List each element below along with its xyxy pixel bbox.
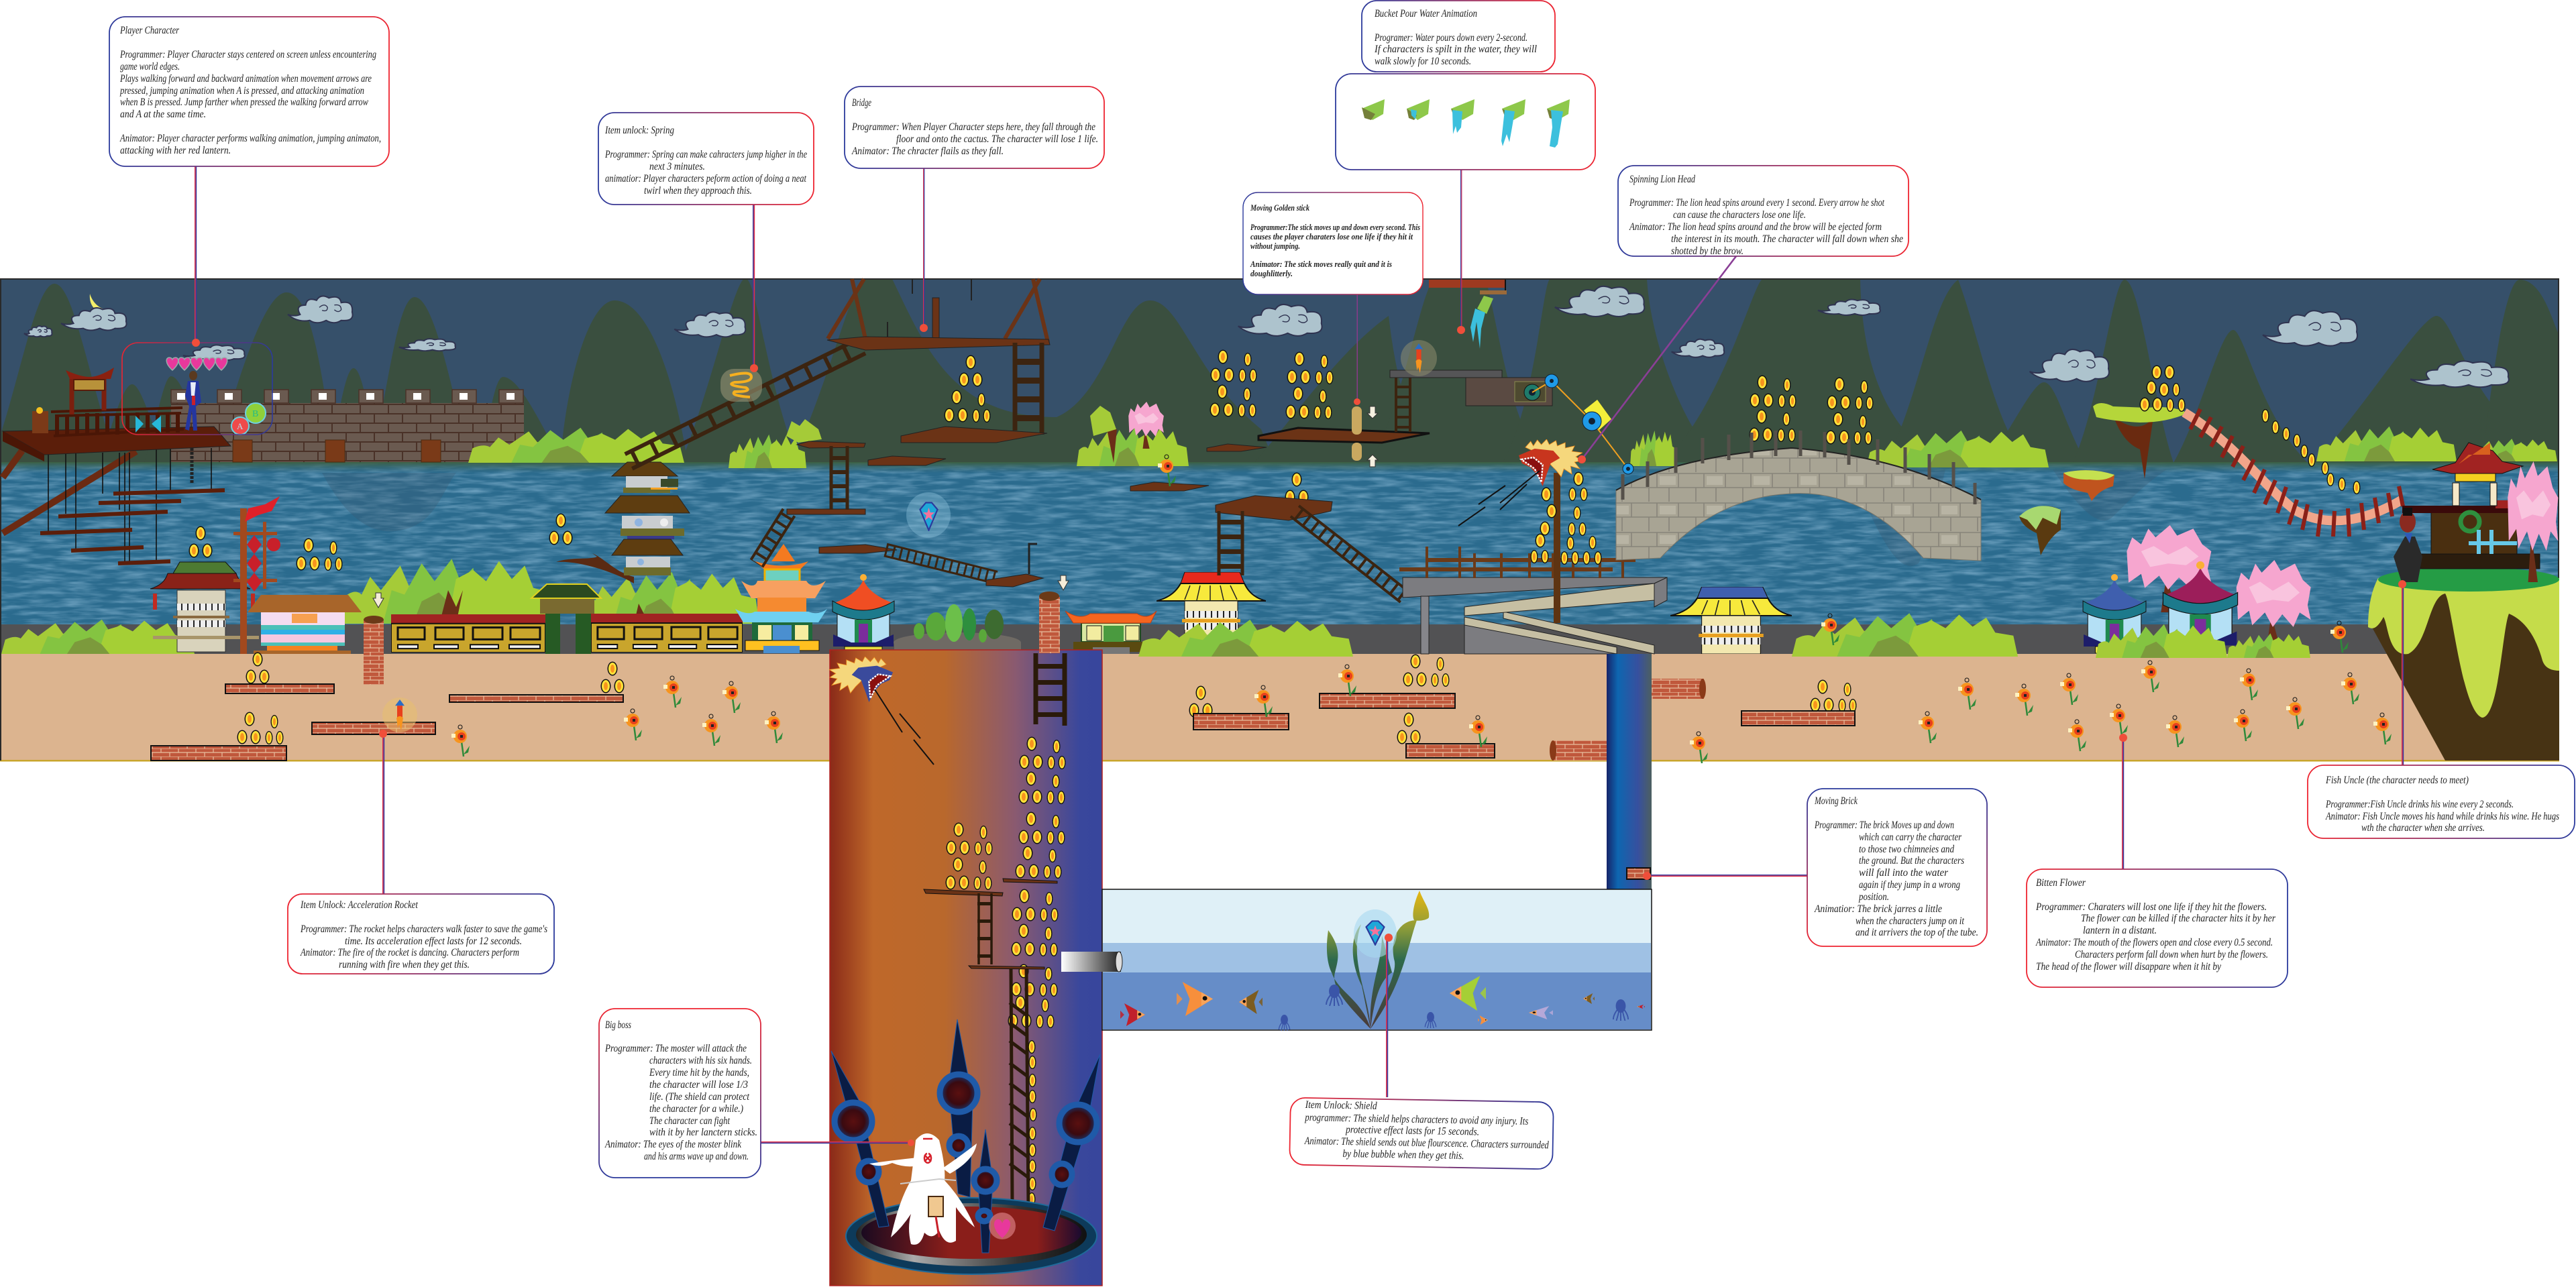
sky backdrop xyxy=(0,278,2559,463)
yellow pagoda with red roof xyxy=(1157,572,1266,639)
road bushes xyxy=(1138,613,2018,657)
callout: acceleration rocket xyxy=(288,894,554,974)
callout: big boss: the character for a while.) xyxy=(649,1103,743,1115)
left pagoda xyxy=(150,562,259,652)
life hearts xyxy=(167,358,227,370)
callout: big boss: characters with his six hands. xyxy=(649,1055,752,1066)
dragon head in shaft xyxy=(829,657,893,702)
callout: player character: when B is pressed. Jump farther when pressed the walking forward arrow xyxy=(120,97,368,108)
callout: fish uncle: Fish Uncle (the character needs to meet) xyxy=(2325,775,2469,786)
callout: player character: Animator: Player character performs walking animation, jumping animaton, xyxy=(119,133,381,144)
callout: fish uncle xyxy=(2308,765,2575,838)
control buttons: B xyxy=(252,409,258,419)
callout: player character: and A at the same time. xyxy=(120,109,206,120)
player character xyxy=(185,371,201,431)
callout: item unlock shield xyxy=(1289,1098,1554,1169)
callout: acceleration rocket: time. Its acceleration effect lasts for 12 seconds. xyxy=(345,936,522,947)
small trees on background xyxy=(786,402,1164,463)
shaft arrows xyxy=(875,689,934,765)
callout: bridge: Animator: The chracter flails as they fall. xyxy=(851,146,1004,157)
callout: spinning lion head xyxy=(1618,166,1909,257)
stone bridge xyxy=(1616,431,1981,561)
floating islands xyxy=(2019,403,2188,555)
callout: bitten flower: Animator: The mouth of the flowers open and close every 0.5 second. xyxy=(2035,937,2273,948)
callout: acceleration rocket: Animator: The fire of the rocket is dancing. Characters perform xyxy=(300,947,519,958)
callout: acceleration rocket: Item Unlock: Acceleration Rocket xyxy=(300,899,418,911)
willows behind town xyxy=(340,553,759,624)
shaft platforms and ladders xyxy=(924,879,1057,1207)
callout: moving brick: Programmer: The brick Moves up and down xyxy=(1814,820,1954,831)
shield pickup xyxy=(906,492,951,538)
dock with ramps xyxy=(1399,547,1667,654)
callout: bucket pour water animation: Bucket Pour Water Animation xyxy=(1375,8,1477,19)
arrow marker xyxy=(373,593,384,608)
river water xyxy=(0,462,2559,625)
heart pickup xyxy=(989,1213,1016,1239)
spring item xyxy=(720,369,762,402)
coin tower xyxy=(1531,472,1602,565)
yellow long buildings xyxy=(391,584,743,654)
connector lines xyxy=(195,166,2404,1143)
callout: bitten flower xyxy=(2027,869,2288,987)
fish uncle character xyxy=(2394,508,2422,582)
callout: bucket pour water animation: walk slowly for 10 seconds. xyxy=(1375,56,1471,67)
callout: moving brick: position. xyxy=(1858,891,1889,903)
panel: bucket animation frames xyxy=(1336,74,1595,170)
seaweed xyxy=(1327,891,1429,1029)
callout: item unlock spring: Item unlock: Spring xyxy=(604,125,674,136)
callout: bitten flower: Characters perform fall down when hurt by the flowers. xyxy=(2075,949,2268,960)
moving golden stick xyxy=(1352,406,1378,467)
background bushes xyxy=(468,427,2557,468)
callout: moving brick: the ground. But the characters xyxy=(1859,855,1964,866)
callout: bucket pour water animation xyxy=(1362,1,1555,72)
callout: player character: Programmer: Player Character stays centered on screen unless encountering xyxy=(119,49,376,60)
connector end dots xyxy=(192,324,2406,1146)
callout: spinning lion head: Programmer: The lion head spins around every 1 second. Every arrow he shot xyxy=(1629,197,1884,209)
chimney 2 xyxy=(1039,592,1060,653)
center platform and ladders xyxy=(1216,496,1332,575)
bricks in ground xyxy=(151,684,1855,761)
ladder to slab xyxy=(1396,378,1410,432)
moon xyxy=(90,294,109,312)
pulley kite xyxy=(1532,374,1633,474)
callout: moving golden stick: Moving Golden stick xyxy=(1250,203,1309,213)
callout: moving golden stick: without jumping. xyxy=(1250,241,1300,251)
horizontal brick pipes xyxy=(1550,679,1706,761)
upper stick platform xyxy=(1258,428,1430,443)
callout: player character: game world edges. xyxy=(120,61,180,72)
great wall xyxy=(171,390,524,462)
callout: bridge xyxy=(845,87,1104,168)
callout: bridge: floor and onto the cactus. The character will lose 1 life. xyxy=(896,133,1098,145)
callout: bucket pour water animation: If characters is spilt in the water, they will xyxy=(1374,44,1537,55)
lion pole xyxy=(1554,473,1560,623)
spinning lion head xyxy=(1519,439,1582,486)
orange pagoda xyxy=(735,544,827,653)
callout: big boss: Every time hit by the hands, xyxy=(649,1067,749,1078)
callout: fish uncle: Programmer:Fish Uncle drinks his wine every 2 seconds. xyxy=(2325,799,2514,810)
callout: spinning lion head: Animator: The lion head spins around and the brow will be ejected form xyxy=(1629,221,1882,233)
callout: moving brick: to those two chimneies and xyxy=(1859,844,1955,855)
flag pole with lanterns xyxy=(233,496,280,654)
coins in boss shaft xyxy=(946,736,1065,1206)
long ladder to spring xyxy=(625,339,865,469)
pipe in shaft xyxy=(1061,952,1122,972)
callout: item unlock spring: animatior: Player characters peform action of doing a neat xyxy=(605,173,806,184)
callout: bucket pour water animation: Programer: Water pours down every 2-second. xyxy=(1374,32,1527,44)
boss spike rings xyxy=(835,1074,1097,1221)
callout: moving brick: which can carry the character xyxy=(1859,832,1962,843)
underwater panel xyxy=(1102,889,1652,1030)
tall pagoda xyxy=(605,462,690,575)
mountains xyxy=(0,278,2559,463)
callout: moving golden stick: causes the player charaters lose one life if they hit it xyxy=(1250,231,1413,241)
clouds xyxy=(24,286,2509,387)
blue tube xyxy=(1607,654,1652,889)
kiosk houses xyxy=(833,574,894,653)
control buttons xyxy=(136,403,266,435)
callout: moving brick xyxy=(1807,789,1987,946)
boss pit ring xyxy=(846,1198,1097,1274)
boss spikes xyxy=(831,1019,1100,1253)
cactus garden xyxy=(894,604,1021,653)
callout: acceleration rocket: Programmer: The rocket helps characters walk faster to save the game's xyxy=(300,924,547,935)
shaft top ladder xyxy=(1036,653,1065,726)
coins water and land xyxy=(189,350,1873,744)
callout: bitten flower: Bitten Flower xyxy=(2036,877,2086,889)
callout: moving brick: Animatior: The brick jarres a little xyxy=(1814,903,1942,915)
callout: player character: pressed, jumping animation when A is pressed, and attacking animation xyxy=(119,85,364,97)
bucket pouring water xyxy=(1429,280,1507,349)
striped house xyxy=(248,595,362,654)
callout: bitten flower: The flower can be killed if the character hits it by her xyxy=(2081,913,2276,924)
road bush left xyxy=(1,620,195,654)
cherry trees and kiosks xyxy=(2083,525,2311,658)
callout: item unlock shield: by blue bubble when they get this. xyxy=(1342,1148,1464,1162)
callout: player character: Player Character xyxy=(119,25,180,36)
lion machine xyxy=(1390,370,1552,406)
fish and octopus xyxy=(1120,976,1645,1031)
callout: moving golden stick xyxy=(1243,192,1423,294)
callout: fish uncle: wth the character when she arrives. xyxy=(2361,822,2485,834)
callout: bridge: Bridge xyxy=(852,97,871,109)
callout: bitten flower: The head of the flower will disappare when it hit by xyxy=(2036,961,2222,972)
slanted bridge plank xyxy=(819,544,1043,587)
callout: item unlock spring: Programmer: Spring can make cahracters jump higher in the xyxy=(604,149,807,160)
callout: big boss: and his arms wave up and down. xyxy=(644,1151,749,1162)
callout: spinning lion head: shotted by the brow. xyxy=(1671,245,1743,257)
rocket pickup sky xyxy=(1401,340,1437,376)
callout: item unlock shield: protective effect lasts for 15 seconds. xyxy=(1345,1124,1479,1138)
callout: moving brick: Moving Brick xyxy=(1814,795,1858,807)
slanted center ladder xyxy=(1291,506,1409,602)
cherry tree at house xyxy=(2508,461,2558,582)
callout: big boss: Animator: The eyes of the moster blink xyxy=(604,1139,742,1150)
platform ladder top right xyxy=(1015,343,1042,435)
callout: big boss xyxy=(599,1009,761,1178)
callout: player character: attacking with her red lantern. xyxy=(120,145,231,156)
coins on bridge and island xyxy=(2140,365,2360,494)
callout: big boss: with it by her lanctern sticks. xyxy=(649,1127,757,1138)
ladder 3 xyxy=(751,509,794,567)
scene frame xyxy=(1,279,2559,761)
callout: item unlock shield: programmer: The shield helps characters to avoid any injury. Its xyxy=(1304,1112,1528,1127)
callout: bitten flower: Programmer: Charaters will lost one life if they hit the flowers. xyxy=(2035,901,2267,913)
callout: moving brick: will fall into the water xyxy=(1859,867,1949,879)
callout: big boss: Big boss xyxy=(605,1019,631,1031)
callout: big boss: life. (The shield can protect xyxy=(649,1091,749,1103)
callout: spinning lion head: the interest in its mouth. The character will fall down when she xyxy=(1671,233,1903,245)
brick chimney left xyxy=(364,616,384,685)
small ladders and planks left xyxy=(787,441,1267,514)
callout: moving brick: again if they jump in a wrong xyxy=(1859,879,1960,891)
callout: moving brick: when the characters jump on it xyxy=(1856,915,1964,927)
callout: spinning lion head: Spinning Lion Head xyxy=(1629,174,1696,185)
fish uncle house xyxy=(2402,443,2540,569)
callout: moving golden stick: Animator: The stick moves really quit and it is xyxy=(1250,259,1392,269)
floating platform xyxy=(901,427,1047,443)
callout: spinning lion head: can cause the characters lose one life. xyxy=(1673,209,1806,221)
lion arrows xyxy=(1458,471,1540,526)
ladder 2 xyxy=(831,446,847,510)
flowers xyxy=(451,455,2392,763)
control buttons: A xyxy=(237,421,244,431)
callout: item unlock spring xyxy=(598,113,814,205)
callout: bridge: Programmer: When Player Character steps here, they fall through the xyxy=(851,121,1095,133)
shield item xyxy=(1354,909,1397,958)
orange roof house xyxy=(1065,611,1157,654)
callout: moving golden stick: Programmer:The stick moves up and down every second. This xyxy=(1250,222,1420,232)
moving brick xyxy=(1627,868,1650,879)
dragon bone bridge xyxy=(2184,409,2403,537)
callout: big boss: The character can fight xyxy=(649,1115,730,1127)
callout: bitten flower: lantern in a distant. xyxy=(2083,925,2157,936)
callout: big boss: Programmer: The moster will attack the xyxy=(604,1043,747,1054)
top wooden frame xyxy=(827,279,1050,350)
callout: moving golden stick: doughlitterly. xyxy=(1250,268,1293,278)
big boss monster xyxy=(869,1133,977,1245)
boss shaft xyxy=(830,650,1102,1286)
ground edge xyxy=(0,760,2559,762)
callout: item unlock spring: twirl when they approach this. xyxy=(644,185,752,197)
callout: big boss: the character will lose 1/3 xyxy=(649,1079,748,1090)
sand ground xyxy=(0,654,2559,761)
left pier xyxy=(3,368,231,563)
callout: acceleration rocket: running with fire when they get this. xyxy=(339,959,470,970)
arrow marker 2 xyxy=(1058,575,1069,590)
callout: player character xyxy=(109,17,389,166)
acceleration rocket pickup xyxy=(382,697,417,732)
player highlight frame xyxy=(122,343,272,435)
callout: item unlock shield: Item Unlock: Shield xyxy=(1305,1099,1378,1112)
callout: moving brick: and it arrivers the top of the tube. xyxy=(1856,927,1978,938)
yellow pagoda with blue roof xyxy=(1670,587,1792,654)
cloud near player xyxy=(183,345,245,360)
callout: item unlock shield: Animator: The shield sends out blue flourscence. Characters surrounded xyxy=(1304,1135,1550,1151)
fish uncle cliff xyxy=(2368,567,2559,761)
callout: item unlock spring: next 3 minutes. xyxy=(649,161,705,172)
callout: player character: Plays walking forward and backward animation when movement arrows are xyxy=(119,73,372,85)
panel: game level scene xyxy=(0,278,2559,1286)
road xyxy=(0,624,2559,654)
